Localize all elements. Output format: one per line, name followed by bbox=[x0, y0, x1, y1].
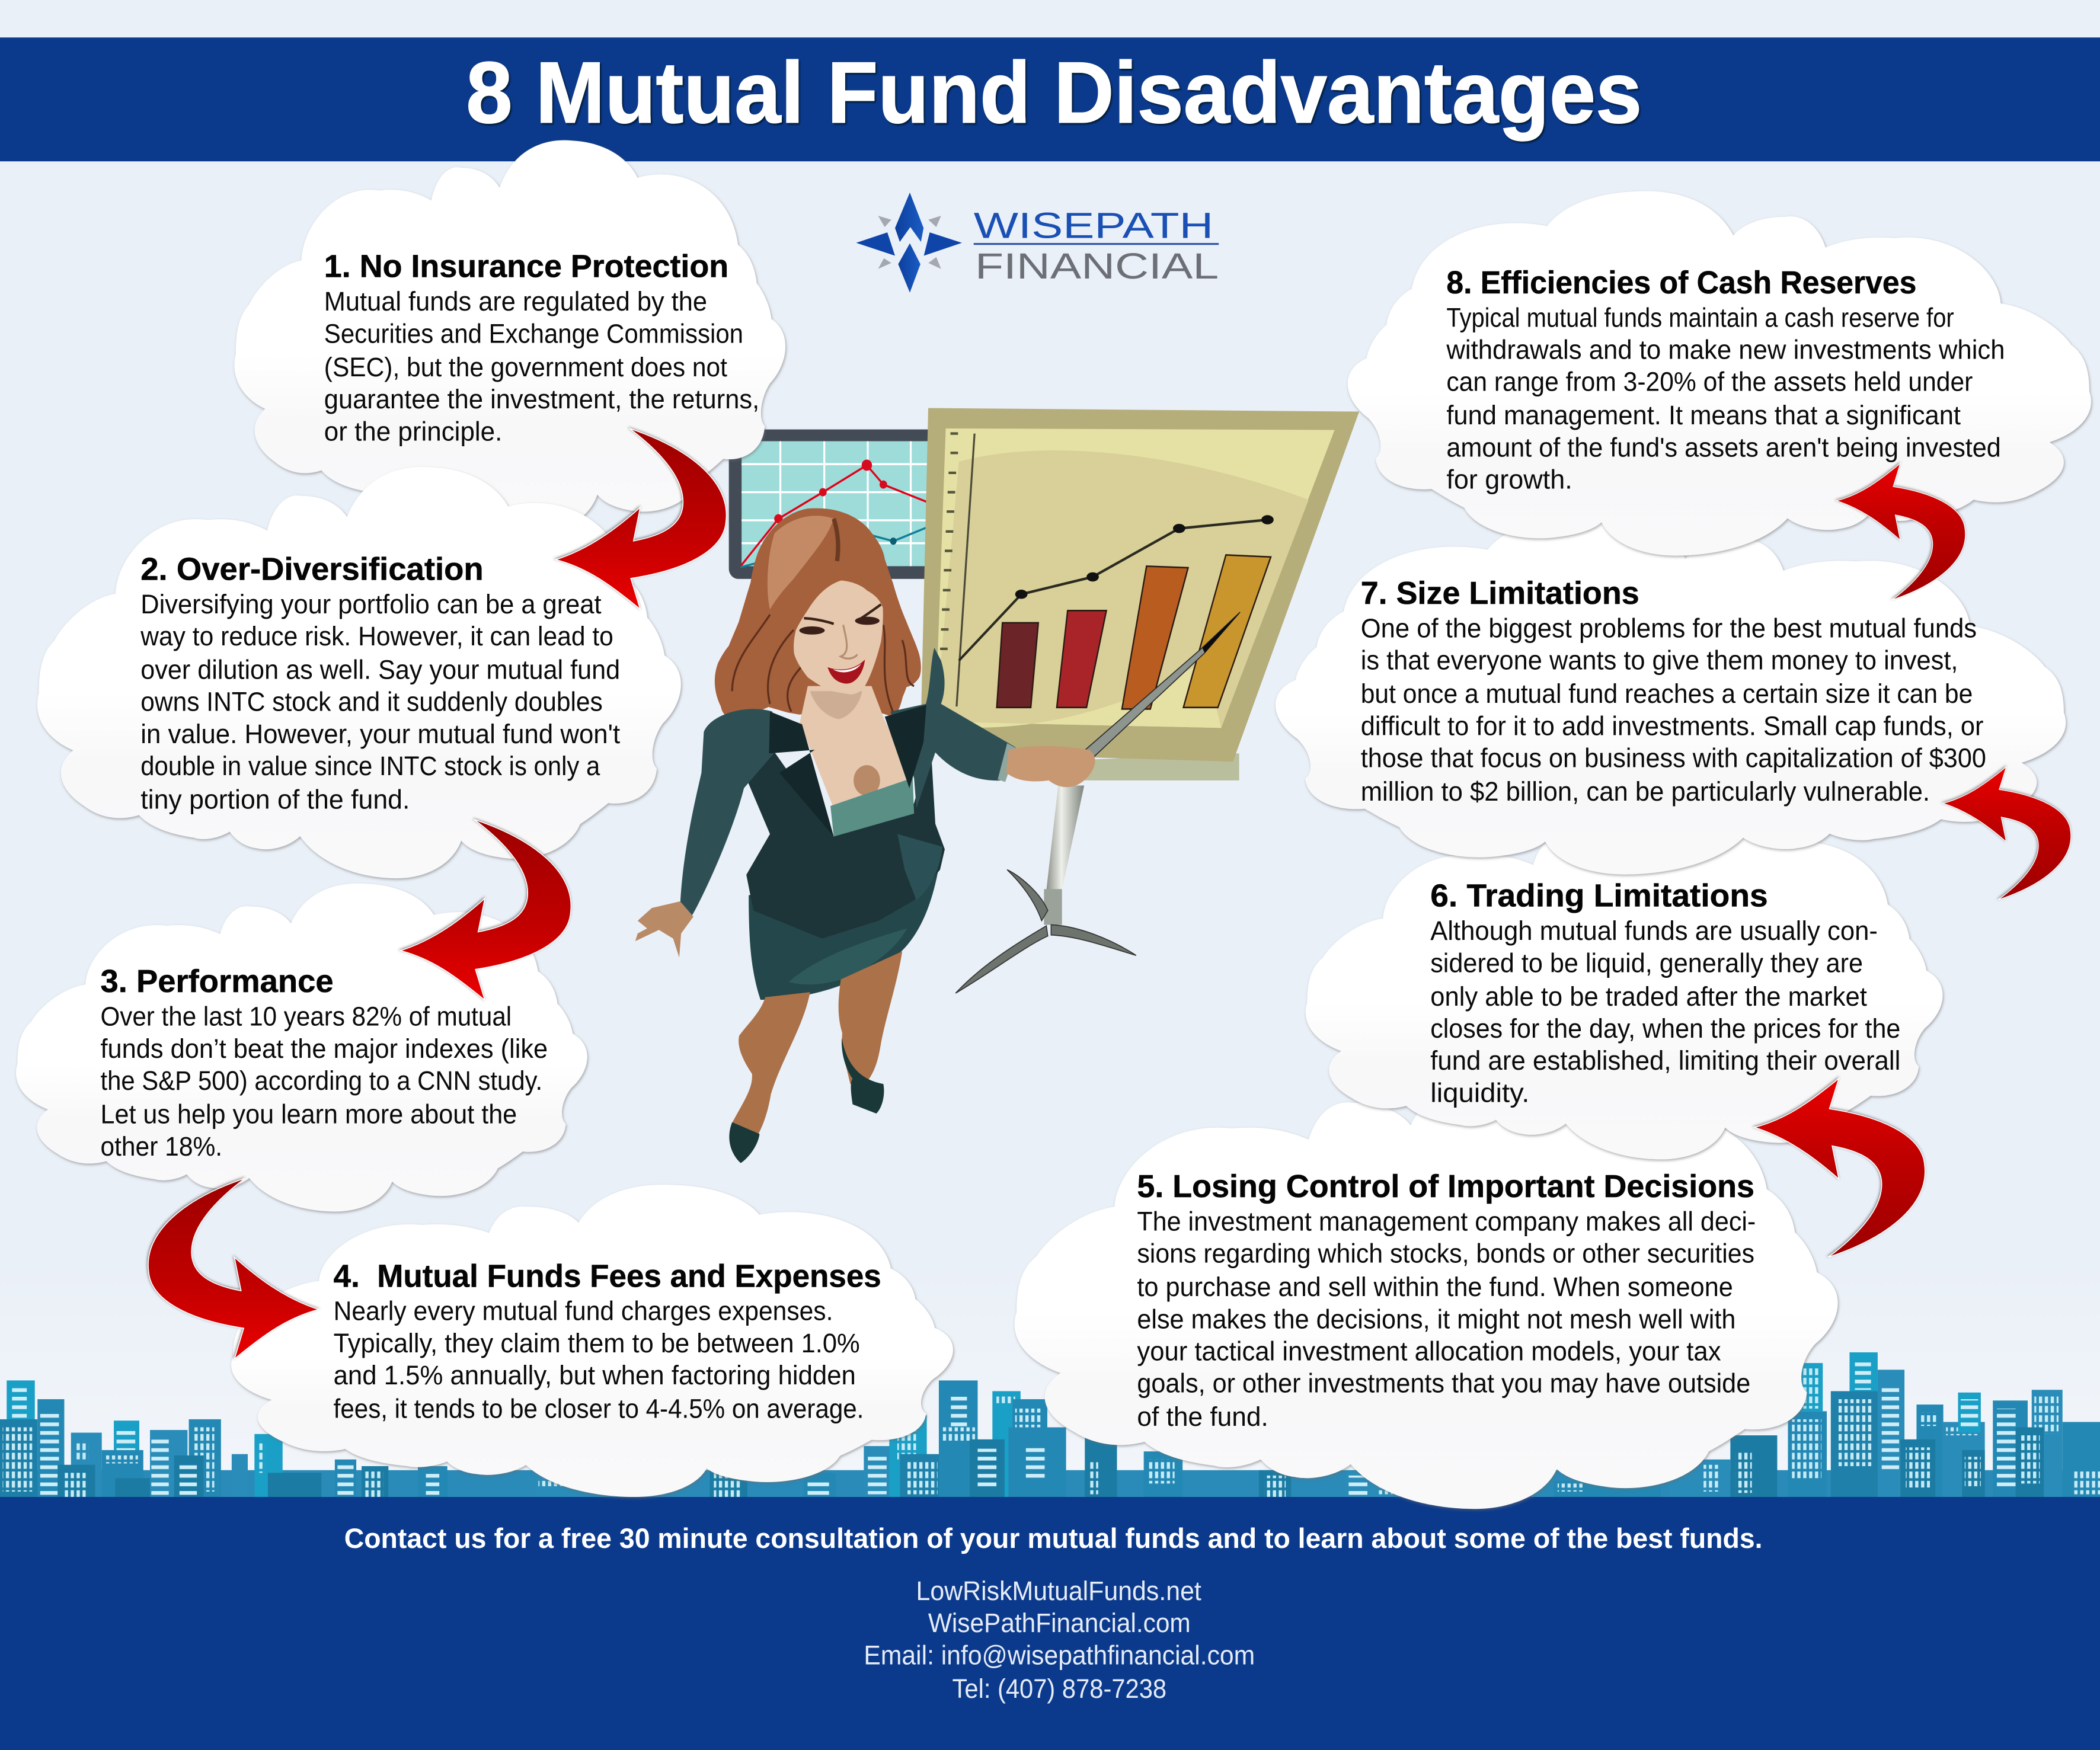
heading 2: 2. Over-Diversification bbox=[140, 551, 484, 587]
cloud 2 bbox=[37, 467, 681, 878]
cloud 4 bbox=[231, 1185, 953, 1497]
footer contact details: WisePathFinancial.com bbox=[928, 1608, 1191, 1638]
arrow: 1 to 2 bbox=[556, 428, 726, 609]
body text 1: guarantee the investment, the returns, bbox=[324, 384, 759, 414]
body text 4: Typically, they claim them to be between 1.0% bbox=[334, 1328, 860, 1358]
logo wordmark FINANCIAL: FINANCIAL bbox=[975, 246, 1219, 286]
arrow: 7 to 8 bbox=[1837, 463, 1965, 600]
body text 1: Securities and Exchange Commission bbox=[324, 318, 743, 348]
body text 3 bbox=[100, 1002, 548, 1162]
body text 1: Mutual funds are regulated by the bbox=[324, 286, 707, 316]
top bbox=[830, 778, 914, 837]
body text 6 bbox=[1430, 916, 1900, 1108]
body text 2: double in value since INTC stock is only a bbox=[140, 751, 600, 781]
body text 8: withdrawals and to make new investments which bbox=[1446, 335, 2005, 365]
body text 1: (SEC), but the government does not bbox=[324, 352, 727, 382]
body text 4: and 1.5% annually, but when factoring hidden bbox=[334, 1360, 856, 1390]
logo wordmark WISEPATH: WISEPATH bbox=[974, 206, 1213, 246]
body text 6: sidered to be liquid, generally they are bbox=[1430, 948, 1863, 978]
hair strands bbox=[732, 615, 914, 712]
right hand bbox=[1006, 746, 1095, 787]
heading 4: 4. Mutual Funds Fees and Expenses bbox=[334, 1258, 881, 1294]
cloud 5 bbox=[1015, 1072, 1838, 1509]
body text 4: Nearly every mutual fund charges expenses. bbox=[334, 1296, 833, 1326]
body text 7: difficult to for it to add investments. Small cap funds, or bbox=[1361, 711, 1983, 741]
footer contact details: LowRiskMutualFunds.net bbox=[916, 1576, 1201, 1606]
body text 5: sions regarding which stocks, bonds or other securities bbox=[1137, 1239, 1754, 1269]
body text 6: fund are established, limiting their overall bbox=[1430, 1045, 1900, 1076]
body text 5: The investment management company makes all deci- bbox=[1137, 1206, 1756, 1236]
body text 2: in value. However, your mutual fund won't bbox=[140, 719, 621, 749]
body text 2: over dilution as well. Say your mutual fund bbox=[140, 655, 620, 685]
body text 6: liquidity. bbox=[1430, 1077, 1529, 1108]
cloud 1 bbox=[234, 140, 785, 530]
legs bbox=[731, 992, 810, 1140]
body text 3: Let us help you learn more about the bbox=[100, 1099, 517, 1130]
cloud 3 bbox=[16, 884, 587, 1211]
cloud 6 bbox=[1306, 811, 1943, 1159]
illustration: presenter with chart board bbox=[635, 408, 1359, 1163]
body text 7: those that focus on business with capitalization of $300 bbox=[1361, 743, 1986, 773]
body text 1: or the principle. bbox=[324, 416, 502, 446]
body text 7 bbox=[1361, 613, 1986, 807]
body text 4 bbox=[334, 1296, 864, 1424]
body text 7: million to $2 billion, can be particularly vulnerable. bbox=[1361, 776, 1930, 807]
icon: compass star bbox=[856, 193, 962, 293]
body text 8: fund management. It means that a significant bbox=[1446, 400, 1961, 430]
flip chart board bbox=[920, 408, 1359, 780]
jacket left sleeve bbox=[680, 709, 775, 916]
panel: 7 Size Limitations bbox=[1276, 515, 2066, 875]
body text 8: for growth. bbox=[1446, 465, 1572, 495]
body text 7: but once a mutual fund reaches a certain size it can be bbox=[1361, 679, 1973, 709]
footer contact details: Email: info@wisepathfinancial.com bbox=[864, 1640, 1255, 1670]
body text 2: way to reduce risk. However, it can lead to bbox=[140, 621, 613, 651]
face bbox=[794, 580, 883, 695]
body text 5: of the fund. bbox=[1137, 1402, 1268, 1432]
hair bbox=[715, 508, 921, 718]
cloud 7 bbox=[1276, 515, 2066, 875]
skirt bbox=[749, 859, 940, 1000]
panel: 6 Trading Limitations bbox=[1306, 811, 1943, 1159]
board stand bbox=[955, 786, 1136, 993]
body text 3: funds don’t beat the major indexes (like bbox=[100, 1034, 548, 1064]
arrow: 3 to 4 bbox=[148, 1178, 319, 1359]
monitor with line chart bbox=[729, 430, 941, 579]
body text 3: the S&P 500) according to a CNN study. bbox=[100, 1066, 542, 1096]
heading 8: 8. Efficiencies of Cash Reserves bbox=[1446, 265, 1916, 300]
pointer stick bbox=[1079, 612, 1240, 762]
body text 3: Over the last 10 years 82% of mutual bbox=[100, 1002, 512, 1032]
body text 7: One of the biggest problems for the best mutual funds bbox=[1361, 613, 1977, 643]
footer contact details: Tel: (407) 878-7238 bbox=[952, 1674, 1166, 1704]
body text 6: only able to be traded after the market bbox=[1430, 981, 1867, 1012]
jacket right sleeve bbox=[890, 648, 1016, 808]
panel: 3 Performance bbox=[16, 884, 587, 1211]
body text 5: your tactical investment allocation models, your tax bbox=[1137, 1336, 1721, 1367]
body text 5 bbox=[1137, 1206, 1756, 1432]
body text 8: amount of the fund's assets aren't being invested bbox=[1446, 432, 2001, 462]
body text 5: else makes the decisions, it might not mesh well with bbox=[1137, 1304, 1735, 1334]
city skyline bbox=[0, 1352, 2100, 1497]
body text 2: owns INTC stock and it suddenly doubles bbox=[140, 687, 603, 717]
body text 8: Typical mutual funds maintain a cash reserve for bbox=[1446, 302, 1954, 332]
panel: 1 No Insurance Protection bbox=[234, 140, 785, 530]
body text 4: fees, it tends to be closer to 4-4.5% on average. bbox=[334, 1394, 864, 1424]
heading 3: 3. Performance bbox=[100, 964, 334, 999]
arrow: 6 to 7 bbox=[1943, 767, 2071, 900]
footer band bbox=[0, 1497, 2100, 1750]
arrow: 2 to 3 bbox=[401, 820, 571, 1000]
panel: 5 Losing Control of Important Decisions bbox=[1015, 1072, 1838, 1509]
arrow: 5 to 6 bbox=[1754, 1079, 1925, 1258]
body text 8: can range from 3-20% of the assets held under bbox=[1446, 367, 1973, 397]
body text 7: is that everyone wants to give them money to invest, bbox=[1361, 645, 1958, 676]
neck and chest bbox=[800, 686, 914, 808]
heading 1: 1. No Insurance Protection bbox=[324, 249, 728, 284]
panel: 2 Over-Diversification bbox=[37, 467, 681, 878]
footer contact details bbox=[864, 1576, 1255, 1704]
shoes bbox=[729, 1122, 759, 1163]
panel: 8 Efficiencies of Cash Reserves bbox=[1348, 191, 2091, 556]
body text 5: goals, or other investments that you may have outside bbox=[1137, 1368, 1750, 1399]
footer call to action: Contact us for a free 30 minute consultation of your mutual funds and to learn about some of the best funds. bbox=[344, 1523, 1763, 1554]
body text 5: to purchase and sell within the fund. When someone bbox=[1137, 1272, 1733, 1302]
cloud 8 bbox=[1348, 191, 2091, 556]
body text 6: Although mutual funds are usually con- bbox=[1430, 916, 1878, 946]
title: 8 Mutual Fund Disadvantages bbox=[466, 44, 1642, 142]
body text 6: closes for the day, when the prices for the bbox=[1430, 1013, 1900, 1044]
heading 6: 6. Trading Limitations bbox=[1430, 878, 1768, 914]
heading 5: 5. Losing Control of Important Decisions bbox=[1137, 1169, 1754, 1204]
panel: 4 Mutual Funds Fees and Expenses bbox=[231, 1185, 953, 1497]
woman presenter bbox=[635, 508, 1240, 1163]
header band bbox=[0, 37, 2100, 161]
body text 8 bbox=[1446, 302, 2005, 495]
heading 7: 7. Size Limitations bbox=[1361, 575, 1639, 611]
logo: WisePath Financial bbox=[856, 193, 1219, 293]
body text 3: other 18%. bbox=[100, 1131, 222, 1162]
body text 2 bbox=[140, 589, 621, 815]
jacket torso bbox=[744, 742, 945, 939]
body text 2: tiny portion of the fund. bbox=[140, 785, 410, 815]
body text 1 bbox=[324, 286, 759, 446]
left hand bbox=[635, 901, 693, 958]
body text 2: Diversifying your portfolio can be a great bbox=[140, 589, 602, 619]
